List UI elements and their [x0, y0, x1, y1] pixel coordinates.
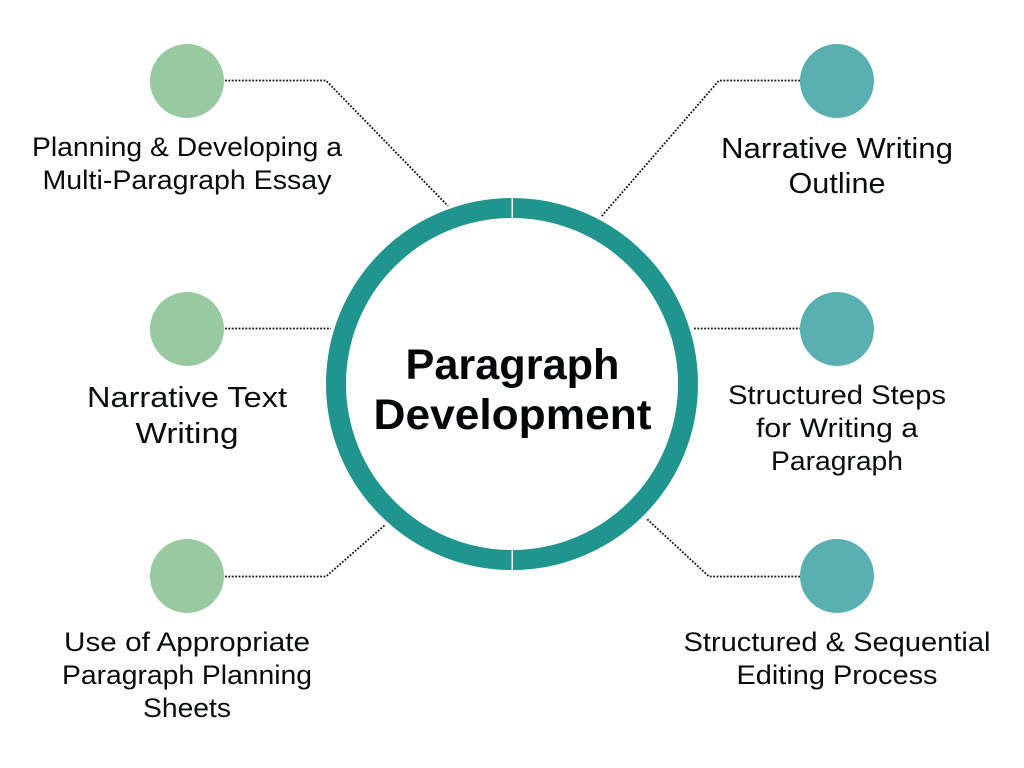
node: Use of Appropriate Paragraph Planning Sheets: Sheets [143, 693, 231, 723]
node: Planning and Developing a Multi-Paragraph Essay [32, 44, 343, 195]
node: Narrative Text Writing [87, 292, 287, 450]
node: Use of Appropriate Paragraph Planning Sheets: Use of Appropriate [64, 627, 310, 657]
node: Use of Appropriate Paragraph Planning Sheets: Paragraph Planning [62, 660, 312, 690]
central title: Paragraph [406, 341, 620, 389]
node: Structured Steps for Writing a Paragraph: Structured Steps [728, 380, 946, 410]
node: Narrative Writing Outline: Narrative Writing [721, 133, 953, 165]
central title [374, 341, 652, 439]
node: Structured and Sequential Editing Process [684, 539, 990, 690]
node: Narrative Text Writing: Narrative Text [87, 382, 287, 414]
central title: Development [374, 391, 652, 439]
connector: bottom right [647, 519, 800, 576]
node: Narrative Writing Outline [721, 44, 953, 200]
connector: top left [225, 80, 448, 206]
node: Structured Steps for Writing a Paragraph: for Writing a [756, 413, 919, 443]
node: Structured and Sequential Editing Process: Structured & Sequential [684, 627, 990, 657]
connector: bottom left [225, 525, 385, 576]
node: Narrative Text Writing: Writing [136, 418, 238, 450]
connector: top right [601, 80, 800, 217]
central ring [336, 197, 688, 571]
connector: middle right [694, 328, 800, 330]
node: Structured Steps for Writing a Paragraph: Paragraph [771, 446, 903, 476]
node: Structured and Sequential Editing Process: Editing Process [736, 660, 938, 690]
node: Narrative Writing Outline: Outline [788, 168, 886, 200]
node: Planning and Developing a Multi-Paragraph Essay: Multi-Paragraph Essay [42, 165, 332, 195]
node: Use of Appropriate Paragraph Planning Sheets [62, 539, 312, 723]
node: Planning and Developing a Multi-Paragraph Essay: Planning & Developing a [32, 132, 343, 162]
node: Structured Steps for Writing a Paragraph [728, 292, 946, 476]
connector: middle left [225, 328, 331, 330]
